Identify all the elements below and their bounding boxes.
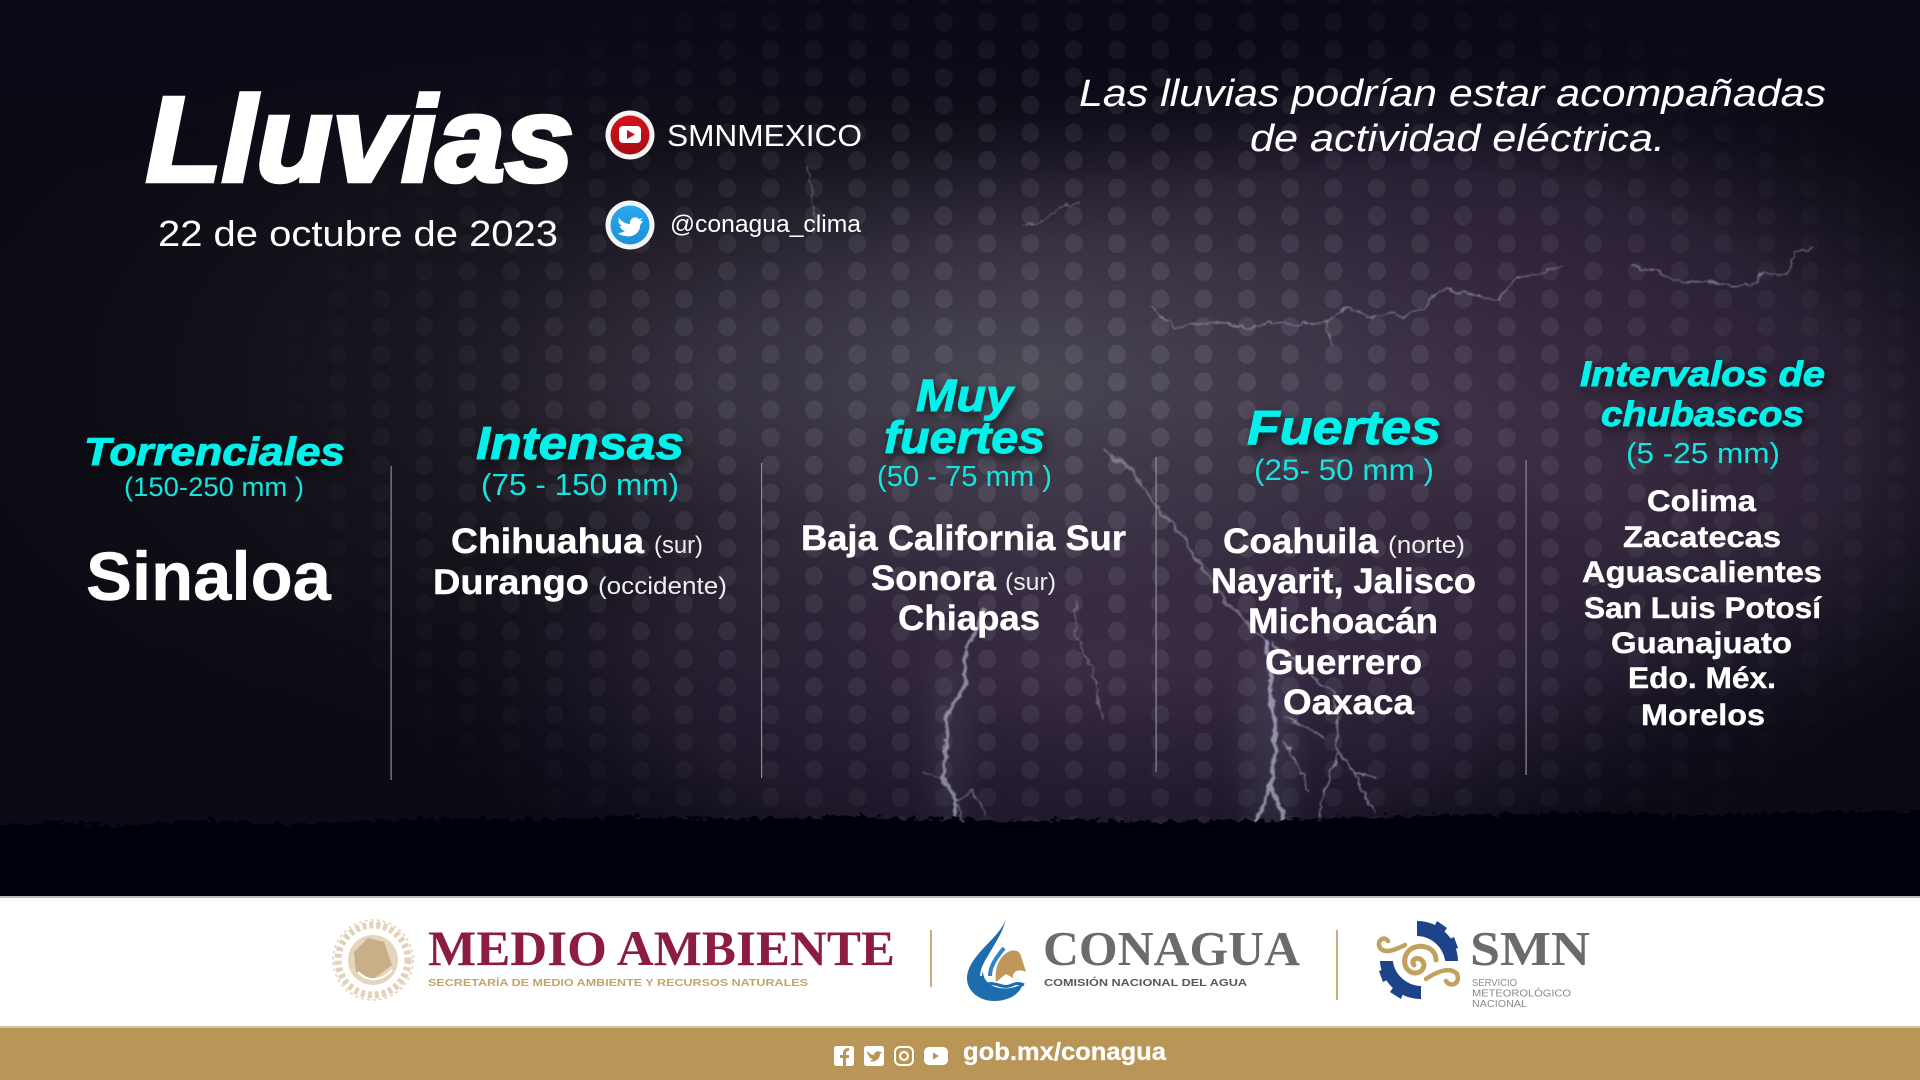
range: (75 - 150 mm) xyxy=(481,467,679,502)
heading: Fuertes xyxy=(1247,402,1441,455)
states: Zacatecas xyxy=(1623,521,1781,554)
states: (sur) xyxy=(1005,569,1056,596)
states: Edo. Méx. xyxy=(1628,662,1776,695)
states xyxy=(801,519,1126,638)
divider xyxy=(1526,460,1527,775)
title: Lluvias: Lluvias xyxy=(146,71,574,207)
states: Aguascalientes xyxy=(1582,556,1822,589)
states: Durango xyxy=(433,563,589,602)
icon: twitter xyxy=(606,200,654,250)
lightning bolts xyxy=(808,165,1813,827)
heading xyxy=(1580,355,1825,434)
states: Baja California Sur xyxy=(801,519,1126,558)
divider xyxy=(761,463,762,778)
youtube handle: SMNMEXICO xyxy=(667,118,862,153)
icon: youtube xyxy=(606,110,654,160)
twitter handle: @conagua_clima xyxy=(670,211,862,238)
column: Torrenciales xyxy=(84,431,345,615)
states: (sur) xyxy=(654,532,703,559)
tree-line horizon silhouette xyxy=(0,810,1920,910)
states: Coahuila xyxy=(1223,522,1379,561)
states: (norte) xyxy=(1388,532,1465,559)
states: Morelos xyxy=(1641,699,1765,732)
states: Michoacán xyxy=(1248,602,1438,641)
range: (5 -25 mm) xyxy=(1626,438,1780,470)
heading: Torrenciales xyxy=(84,431,345,474)
logo text: Conagua: COMISIÓN NACIONAL DEL AGUA xyxy=(1044,976,1247,989)
logo text: SMN xyxy=(1470,921,1590,1010)
heading: Intervalos de xyxy=(1580,355,1825,394)
range: (50 - 75 mm ) xyxy=(877,461,1052,493)
heading: chubascos xyxy=(1601,395,1804,434)
note: electrical activity xyxy=(1079,73,1826,160)
column: Intervalos de chubascos xyxy=(1580,355,1825,732)
states: Chihuahua xyxy=(451,522,645,561)
states xyxy=(433,522,727,602)
column: Intensas xyxy=(433,417,727,602)
states: Guerrero xyxy=(1265,643,1422,682)
icon: SMN swirl and gear xyxy=(1379,921,1458,999)
logo text: SMN: METEOROLÓGICO xyxy=(1472,986,1571,1000)
column: Muy fuertes xyxy=(801,370,1126,638)
range: (25- 50 mm ) xyxy=(1254,454,1434,487)
heading xyxy=(884,370,1045,463)
states: Guanajuato xyxy=(1611,627,1792,660)
panel: footer bar xyxy=(0,1026,1920,1080)
states: (occidente) xyxy=(598,573,727,600)
icon: instagram xyxy=(895,1047,913,1065)
storm background photo xyxy=(0,0,1920,828)
divider xyxy=(1336,930,1338,1000)
states: Colima xyxy=(1647,485,1756,518)
website: gob.mx/conagua xyxy=(963,1038,1167,1066)
range: (150-250 mm ) xyxy=(124,472,304,502)
icon: national seal xyxy=(333,920,413,1000)
divider xyxy=(930,930,932,987)
panel: logo band xyxy=(0,896,1920,1027)
logo text: SMN: NACIONAL xyxy=(1472,999,1527,1010)
states xyxy=(1211,522,1476,722)
states: San Luis Potosí xyxy=(1584,592,1823,625)
state: Sinaloa xyxy=(86,538,332,615)
heading: Intensas xyxy=(476,417,684,469)
icon: facebook xyxy=(834,1046,854,1066)
heading: fuertes xyxy=(884,412,1045,463)
logo text: Medio Ambiente: MEDIO AMBIENTE xyxy=(428,920,895,976)
states: Oaxaca xyxy=(1283,683,1415,722)
date: 22 de octubre de 2023 xyxy=(158,213,558,254)
states: Sonora xyxy=(871,559,997,598)
states xyxy=(1582,485,1823,732)
column: Fuertes xyxy=(1211,402,1476,722)
note: electrical activity: de actividad eléctrica. xyxy=(1250,118,1665,160)
divider xyxy=(390,466,392,780)
states: Nayarit, Jalisco xyxy=(1211,562,1476,601)
heading: Muy xyxy=(916,370,1015,421)
divider xyxy=(1156,457,1157,772)
note: electrical activity: Las lluvias podrían estar acompañadas xyxy=(1079,73,1826,115)
logo text: Medio Ambiente: SECRETARÍA DE MEDIO AMBIENTE Y RECURSOS NATURALES xyxy=(428,976,808,989)
logo text: SMN: SERVICIO xyxy=(1472,978,1517,989)
icon: youtube xyxy=(924,1047,948,1065)
icon: twitter xyxy=(864,1046,884,1066)
states: Chiapas xyxy=(898,599,1040,638)
icon: Conagua drop xyxy=(967,919,1026,1001)
logo text: Conagua: CONAGUA xyxy=(1043,921,1301,976)
logo text: SMN: SMN xyxy=(1470,921,1590,976)
